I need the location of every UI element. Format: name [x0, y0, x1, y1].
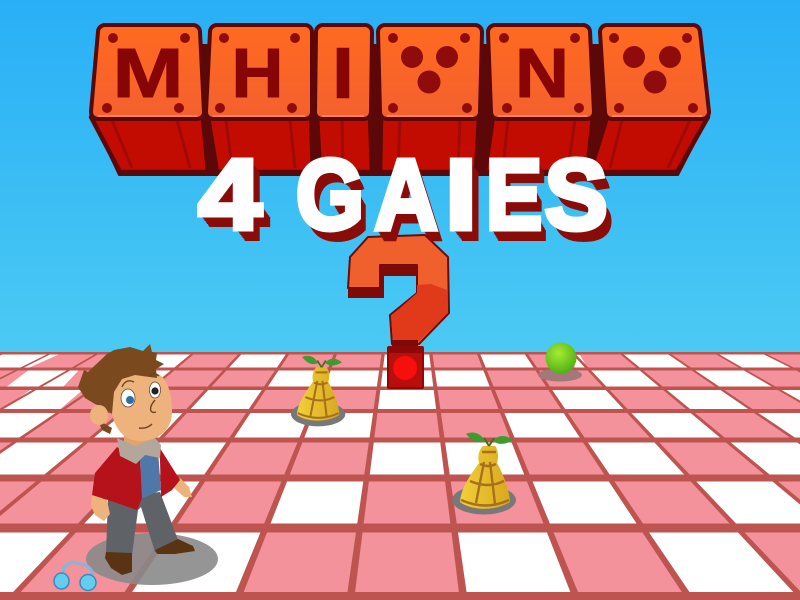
- question mark: [348, 235, 449, 344]
- checkered perspective floor: [0, 352, 800, 600]
- collar: [117, 438, 161, 464]
- sky background: [0, 0, 800, 353]
- block bolts and dice pips: [102, 33, 698, 113]
- pants: [106, 492, 178, 555]
- subtitle: 4 GAIES: S: [544, 139, 608, 251]
- block letters: [112, 34, 569, 112]
- hair: [78, 344, 164, 434]
- title blocks: MHI dice N dice: [91, 32, 708, 175]
- plant bell 1: [291, 356, 345, 426]
- ear: [90, 405, 108, 425]
- eyes: [121, 389, 135, 407]
- jacket: [92, 445, 180, 510]
- plant bell 2: [452, 432, 516, 514]
- icon: headphones: [54, 562, 96, 590]
- green ball with shadow: [538, 342, 582, 382]
- dark silhouette behind the blocks: [92, 45, 708, 175]
- subtitle: 4 GAIES: [197, 139, 612, 251]
- block faces outline: [98, 32, 702, 112]
- block letters: N: [515, 34, 569, 112]
- shoes: [105, 539, 195, 575]
- neck: [124, 432, 152, 452]
- boy character: [78, 344, 218, 585]
- hands: [91, 478, 192, 521]
- block letters: M: [112, 34, 184, 112]
- subtitle: 4 GAIES: I: [445, 139, 477, 251]
- block front shading stripes: [112, 120, 690, 168]
- block fronts: [91, 117, 708, 172]
- subtitle: 4 GAIES: A: [374, 139, 438, 251]
- block faces: [98, 32, 702, 112]
- subtitle: 4 GAIES: G: [296, 139, 364, 251]
- block letters: H: [232, 34, 284, 112]
- subtitle: 4 GAIES: E: [486, 139, 542, 251]
- subtitle: 4 GAIES: 4: [198, 139, 261, 251]
- face: [110, 372, 172, 441]
- block letters: I: [333, 34, 353, 112]
- block rim highlight: [98, 115, 702, 117]
- red button box: [388, 340, 423, 388]
- shirt: [140, 452, 161, 499]
- brows nose mouth: [122, 374, 159, 428]
- character shadow: [86, 533, 218, 585]
